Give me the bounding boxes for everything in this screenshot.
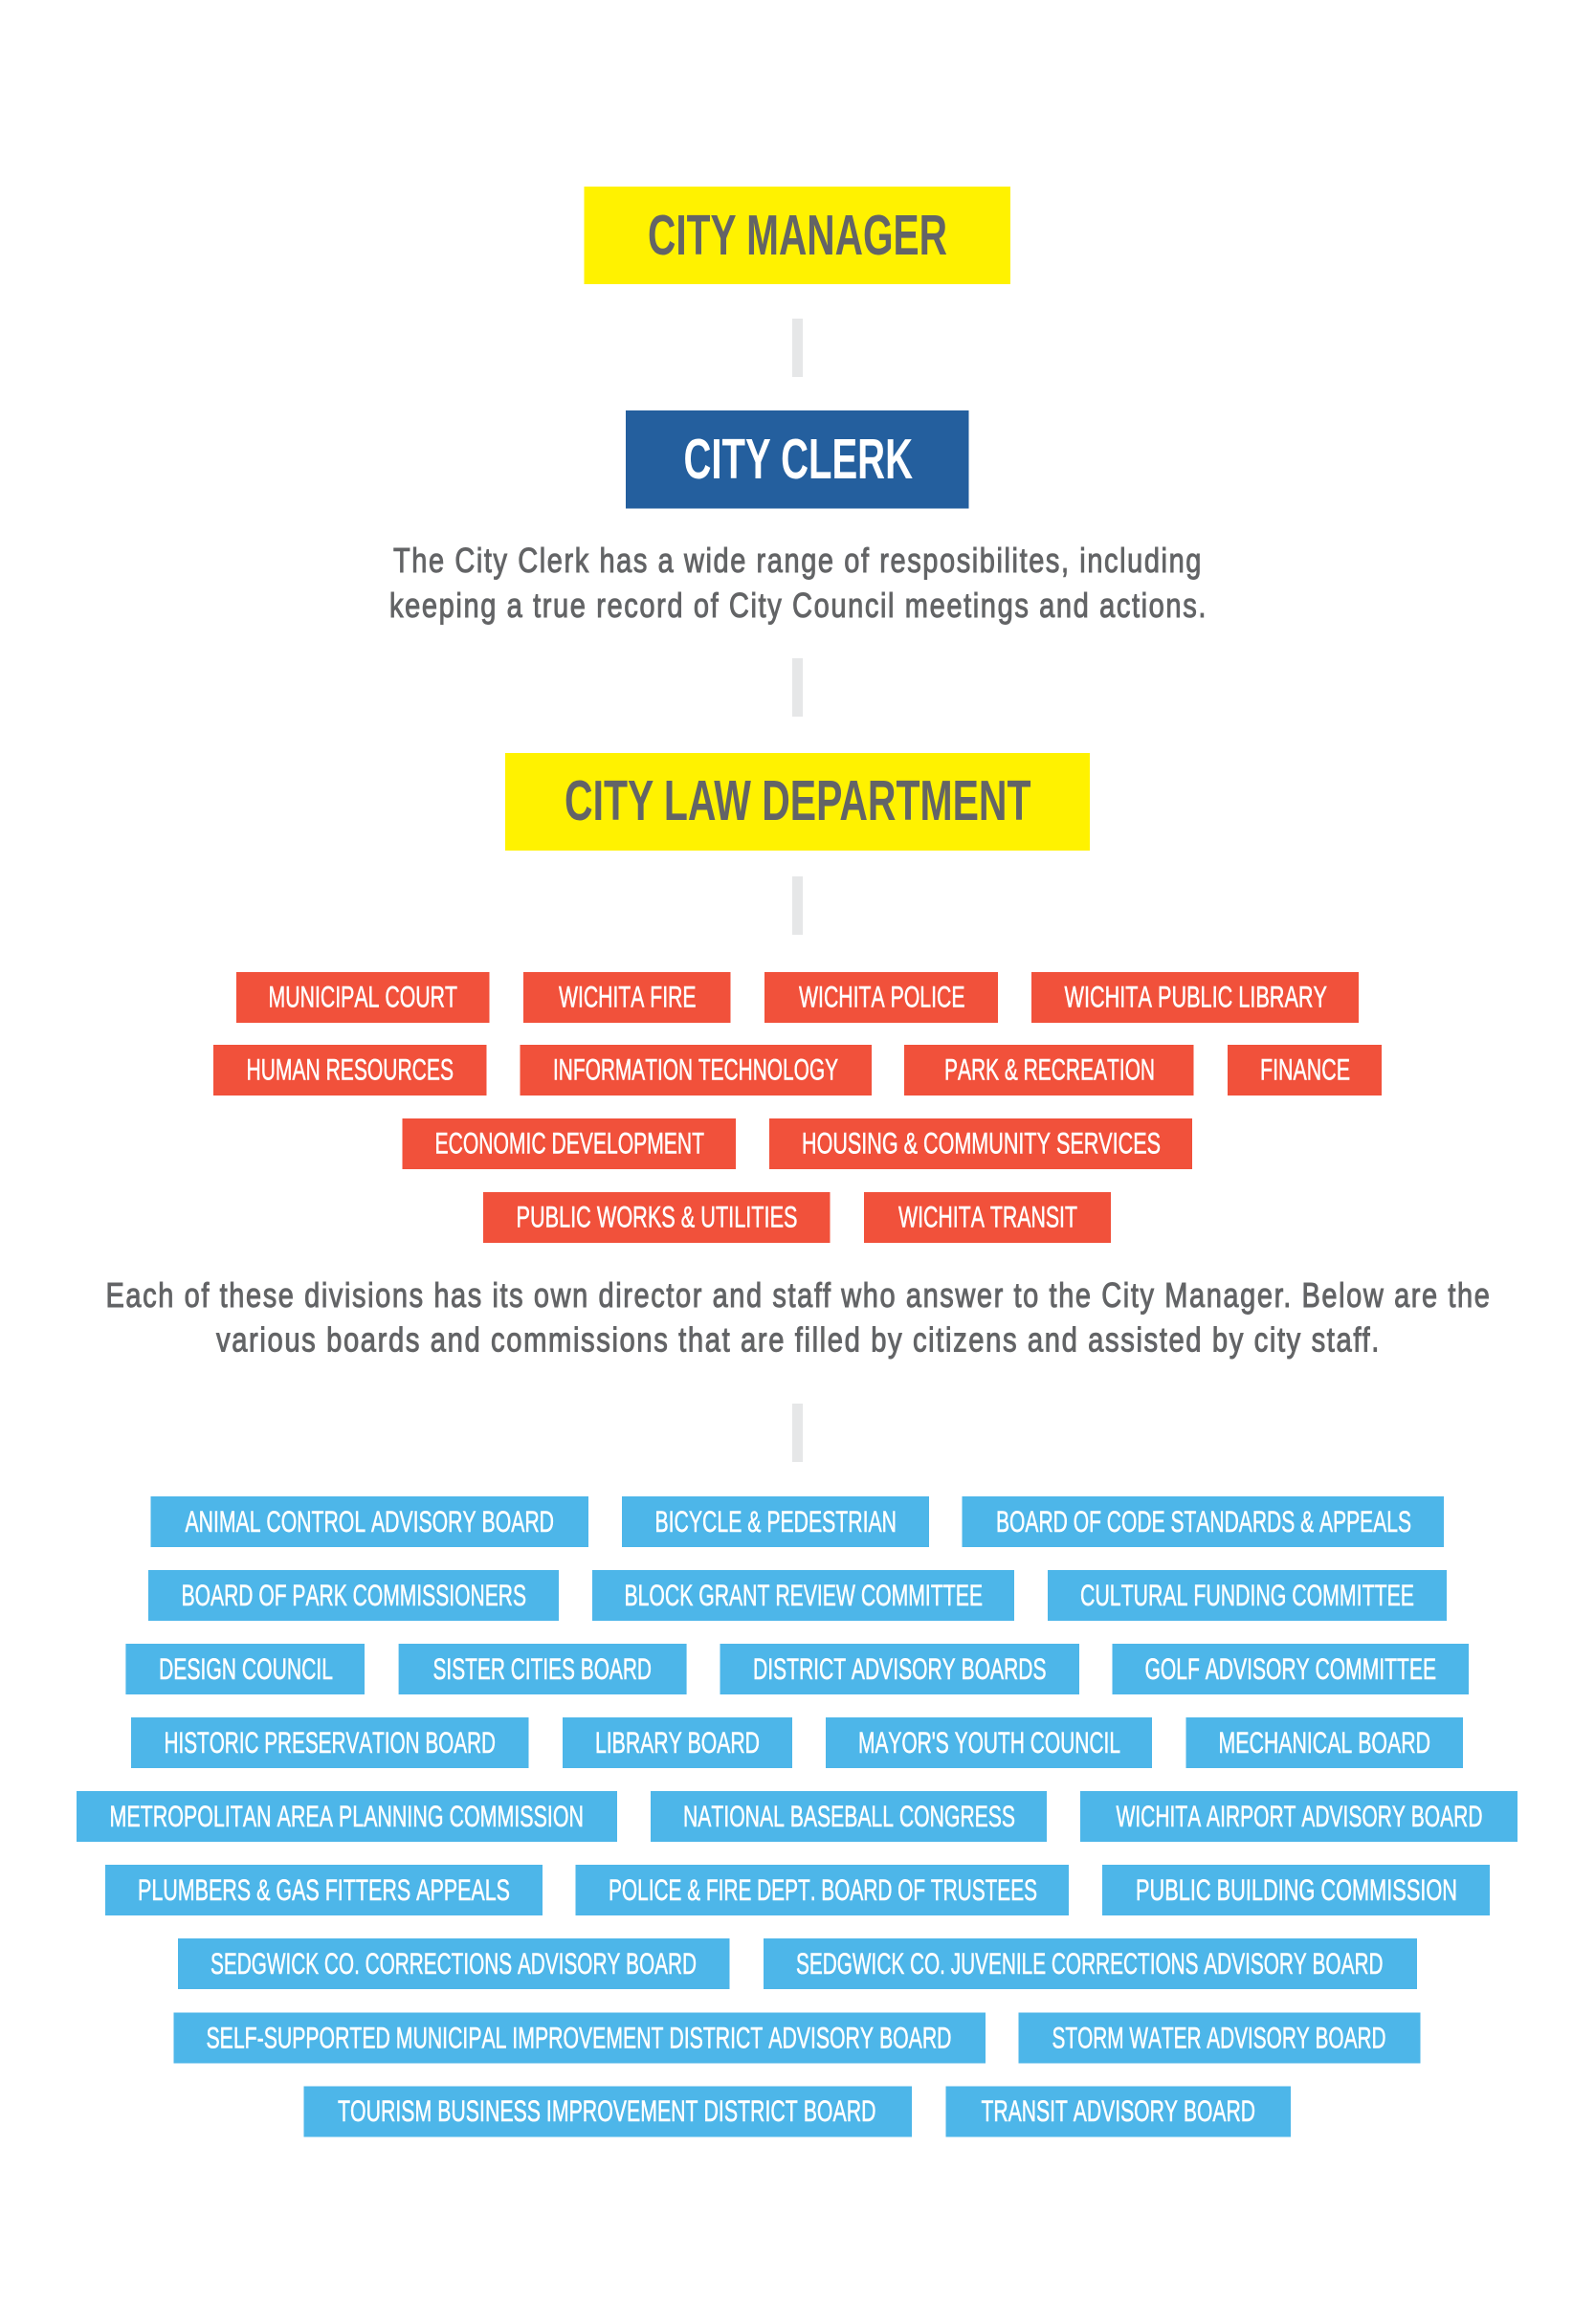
board: Library Board	[563, 1717, 792, 1768]
board: Design Council	[125, 1644, 365, 1694]
board: Storm Water Advisory Board: STORM WATER ADVISORY BOARD	[1052, 2021, 1385, 2055]
board: Wichita Airport Advisory Board	[1080, 1791, 1517, 1842]
board: Historic Preservation Board: HISTORIC PRESERVATION BOARD	[165, 1725, 496, 1760]
board: Public Building Commission: PUBLIC BUILDING COMMISSION	[1136, 1872, 1457, 1907]
heading box: City Clerk: CITY CLERK	[683, 428, 913, 491]
division: Park & Recreation: PARK & RECREATION	[944, 1052, 1155, 1087]
division: Wichita Public Library: WICHITA PUBLIC LIBRARY	[1064, 980, 1327, 1014]
board: Self-Supported Municipal Improvement District Advisory Board: SELF-SUPPORTED MUNICIPAL IMPROVEMENT DISTRICT ADVISORY BOARD	[207, 2021, 951, 2055]
board: Block Grant Review Committee	[592, 1570, 1014, 1621]
board: Sister Cities Board: SISTER CITIES BOARD	[432, 1651, 652, 1686]
board: Storm Water Advisory Board	[1018, 2013, 1420, 2063]
board: Golf Advisory Committee: GOLF ADVISORY COMMITTEE	[1144, 1651, 1436, 1686]
board: Block Grant Review Committee: BLOCK GRANT REVIEW COMMITTEE	[624, 1578, 983, 1612]
board: Transit Advisory Board	[945, 2086, 1291, 2137]
board: Self-Supported Municipal Improvement District Advisory Board	[174, 2013, 986, 2063]
board: Police & Fire Dept. Board of Trustees: POLICE & FIRE DEPT. BOARD OF TRUSTEES	[609, 1872, 1037, 1907]
board: Plumbers & Gas Fitters Appeals: PLUMBERS & GAS FITTERS APPEALS	[138, 1872, 510, 1907]
board: Library Board: LIBRARY BOARD	[595, 1725, 760, 1760]
division: Housing & Community Services: HOUSING & COMMUNITY SERVICES	[802, 1126, 1161, 1161]
board: Mechanical Board	[1186, 1717, 1463, 1768]
heading box: City Clerk	[626, 410, 968, 509]
division: Information Technology	[521, 1045, 872, 1096]
text block: City Clerk description: The City Clerk has a wide range of resposibilites, including	[393, 541, 1203, 580]
connector: divisions to boards	[792, 1404, 803, 1462]
division: Human Resources: HUMAN RESOURCES	[247, 1052, 454, 1087]
heading box: City Law Department	[505, 753, 1090, 851]
division: Wichita Police	[764, 972, 998, 1023]
division: Public Works & Utilities: PUBLIC WORKS & UTILITIES	[517, 1200, 798, 1234]
division: Wichita Fire	[523, 972, 731, 1023]
text block: City Clerk description: keeping a true record of City Council meetings and actions.	[389, 586, 1207, 625]
board: Metropolitan Area Planning Commission: METROPOLITAN AREA PLANNING COMMISSION	[109, 1799, 584, 1833]
division: Information Technology: INFORMATION TECHNOLOGY	[553, 1052, 838, 1087]
board: Mechanical Board: MECHANICAL BOARD	[1219, 1725, 1430, 1760]
connector: law department to divisions	[792, 876, 803, 935]
board: National Baseball Congress: NATIONAL BASEBALL CONGRESS	[683, 1799, 1015, 1833]
board: Design Council: DESIGN COUNCIL	[159, 1651, 333, 1686]
board: Sedgwick Co. Corrections Advisory Board: SEDGWICK CO. CORRECTIONS ADVISORY BOARD	[210, 1946, 697, 1981]
board: Police & Fire Dept. Board of Trustees	[576, 1865, 1069, 1915]
board: National Baseball Congress	[651, 1791, 1047, 1842]
panel: boards and commissions	[77, 1496, 1517, 2137]
board: Sister Cities Board	[399, 1644, 687, 1694]
board: Mayor's Youth Council	[826, 1717, 1152, 1768]
board: Metropolitan Area Planning Commission	[77, 1791, 617, 1842]
board: Transit Advisory Board: TRANSIT ADVISORY BOARD	[982, 2093, 1255, 2128]
connector: manager to clerk	[792, 319, 803, 377]
division: Finance	[1228, 1045, 1382, 1096]
text block: City Clerk description	[389, 541, 1207, 625]
board: Plumbers & Gas Fitters Appeals	[105, 1865, 543, 1915]
division: Wichita Transit	[864, 1192, 1111, 1243]
division: Municipal Court: MUNICIPAL COURT	[268, 980, 457, 1014]
board: Animal Control Advisory Board: ANIMAL CONTROL ADVISORY BOARD	[186, 1504, 554, 1538]
board: Tourism Business Improvement District Board	[304, 2086, 912, 2137]
text block: divisions description	[105, 1275, 1491, 1359]
division: Housing & Community Services	[769, 1118, 1192, 1169]
division: Public Works & Utilities	[483, 1192, 831, 1243]
division: Wichita Police: WICHITA POLICE	[799, 980, 964, 1014]
division: Wichita Public Library	[1031, 972, 1359, 1023]
board: District Advisory Boards	[720, 1644, 1079, 1694]
board: Board of Park Commissioners: BOARD OF PARK COMMISSIONERS	[182, 1578, 526, 1612]
board: Cultural Funding Committee	[1048, 1570, 1447, 1621]
board: Animal Control Advisory Board	[151, 1496, 588, 1547]
heading box: City Manager: CITY MANAGER	[648, 204, 947, 267]
division: Human Resources	[213, 1045, 486, 1096]
board: Sedgwick Co. Juvenile Corrections Advisory Board	[764, 1938, 1417, 1989]
board: Board of Park Commissioners	[148, 1570, 559, 1621]
board: Board of Code Standards & Appeals	[963, 1496, 1444, 1547]
board: Historic Preservation Board	[131, 1717, 528, 1768]
board: Tourism Business Improvement District Board: TOURISM BUSINESS IMPROVEMENT DISTRICT BOARD	[338, 2093, 876, 2128]
board: Bicycle & Pedestrian	[622, 1496, 929, 1547]
connector: clerk to law department	[792, 658, 803, 717]
panel: city divisions	[213, 972, 1382, 1243]
board: Public Building Commission	[1102, 1865, 1490, 1915]
board: Sedgwick Co. Corrections Advisory Board	[178, 1938, 729, 1989]
board: Mayor's Youth Council: MAYOR'S YOUTH COUNCIL	[858, 1725, 1120, 1760]
board: District Advisory Boards: DISTRICT ADVISORY BOARDS	[753, 1651, 1047, 1686]
division: Finance: FINANCE	[1260, 1052, 1350, 1087]
division: Wichita Fire: WICHITA FIRE	[559, 980, 697, 1014]
division: Park & Recreation	[904, 1045, 1194, 1096]
board: Bicycle & Pedestrian: BICYCLE & PEDESTRIAN	[654, 1504, 897, 1538]
board: Cultural Funding Committee: CULTURAL FUNDING COMMITTEE	[1080, 1578, 1414, 1612]
division: Economic Development: ECONOMIC DEVELOPMENT	[434, 1126, 704, 1161]
heading box: City Manager	[584, 187, 1010, 284]
board: Golf Advisory Committee	[1112, 1644, 1469, 1694]
division: Municipal Court	[236, 972, 490, 1023]
heading box: City Law Department: CITY LAW DEPARTMENT	[565, 769, 1031, 832]
division: Economic Development	[402, 1118, 736, 1169]
division: Wichita Transit: WICHITA TRANSIT	[898, 1200, 1077, 1234]
